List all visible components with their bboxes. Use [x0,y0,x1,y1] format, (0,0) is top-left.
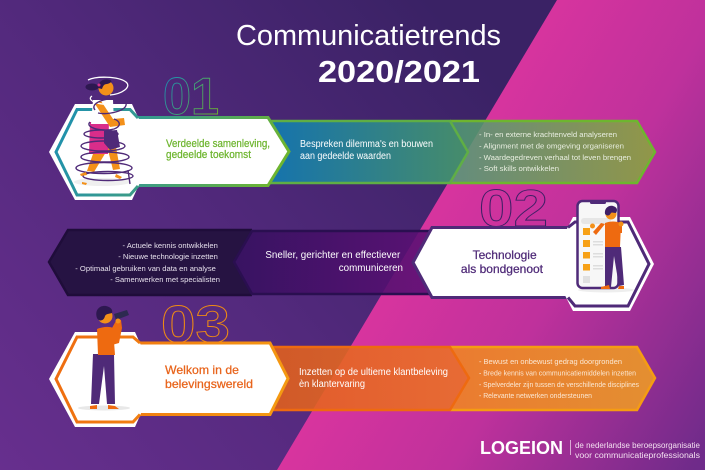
chevron: actions list [450,121,655,183]
heading arrow: Welkom in de belevingswereld: belevingswereld [165,377,253,391]
chevron: actions list: - Relevante netwerken ondersteunen [479,391,592,400]
heading arrow: Welkom in de belevingswereld: Welkom in de [165,363,239,377]
logo: Logeion: voor communicatieprofessionals [575,451,700,460]
chevron: faster communication [234,231,440,294]
title: Communicatietrends [236,20,501,52]
chevron: customer experience [266,347,469,410]
panel: trend 02 [49,180,654,311]
number 01: 01 [163,68,219,126]
title: 2020/2021 [318,54,480,89]
chevron: actions list: - Alignment met de omgeving organiseren [479,142,624,150]
icon: woman in spiral [74,77,133,186]
chevron: actions list: - Actuele kennis ontwikkelen [122,241,218,250]
hexagon frame [549,217,654,311]
logo: Logeion: de nederlandse beroepsorganisatie [575,441,701,450]
chevron: shared values: aan gedeelde waarden [300,151,391,162]
chevron: actions list: - Bewust en onbewust gedrag doorgronden [479,357,622,366]
heading arrow: Technologie als bondgenoot: Technologie [473,248,537,262]
heading arrow: Verdeelde samenleving [130,118,289,186]
chevron: actions list: - Soft skills ontwikkelen [479,164,559,173]
heading arrow: Technologie als bondgenoot [413,228,580,298]
chevron: faster communication: Sneller, gerichter en effectiever [265,250,401,261]
chevron: faster communication: communiceren [339,263,403,274]
chevron: actions list: - Optimaal gebruiken van data en analyse [75,264,216,273]
title [236,20,501,89]
panel: trend 03 [49,296,655,427]
chevron: customer experience: Inzetten op de ultieme klantbeleving [299,367,448,378]
heading arrow: Technologie als bondgenoot: als bondgenoot [461,262,544,276]
hexagon frame [49,332,156,427]
chevron: customer experience: èn klantervaring [299,379,365,390]
heading arrow: Verdeelde samenleving: gedeelde toekomst [166,149,251,161]
chevron: actions list: - Nieuwe technologie inzetten [118,252,218,261]
chevron: actions list: - In- en externe krachtenveld analyseren [479,130,617,139]
hexagon frame [49,104,154,200]
chevron: actions list: - Brede kennis van communicatiemiddelen inzetten [479,368,636,378]
chevron: actions list: - Waardegedreven verhaal tot leven brengen [479,153,631,162]
heading arrow: Verdeelde samenleving: Verdeelde samenleving, [166,138,270,150]
chevron: actions list: - Samenwerken met specialisten [110,275,220,284]
logo: Logeion [480,437,702,460]
icon: person with smartphone [578,200,634,292]
chevron: actions list [49,230,252,295]
logo: Logeion: LOGEION [480,437,563,458]
number 03: 03 [161,296,230,354]
chevron: actions list [450,347,655,410]
chevron: shared values: Bespreken dilemma's en bouwen [300,139,433,150]
panel: trend 01 [49,68,655,200]
chevron: actions list: - Spelverdeler zijn tussen de verschillende disciplines [479,380,639,389]
heading arrow: Welkom in de belevingswereld [130,343,288,414]
number 02: 02 [479,180,548,238]
chevron: shared values [266,121,468,183]
icon: person with binoculars [78,306,130,410]
